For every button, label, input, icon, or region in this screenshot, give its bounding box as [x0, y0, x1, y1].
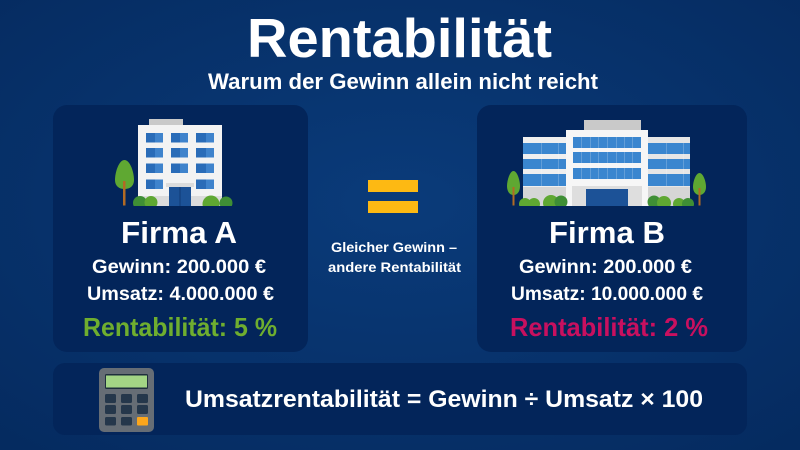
title: Rentabilität — [247, 7, 552, 69]
text: Umsatz A: Umsatz: 4.000.000 € — [87, 283, 274, 305]
panel: Firma A — [53, 105, 308, 352]
text: same profit note: Gleicher Gewinn – — [331, 239, 457, 255]
text: Rentabilität B: Rentabilität: 2 % — [510, 312, 708, 342]
icon: equals sign — [368, 180, 418, 213]
icon: office building A — [115, 119, 232, 212]
panel: Firma B — [477, 105, 747, 352]
text: Gewinn B: Gewinn: 200.000 € — [519, 256, 692, 278]
text: Rentabilität A: Rentabilität: 5 % — [83, 312, 277, 342]
heading: Firma A: Firma A — [121, 215, 237, 250]
text: Umsatz B: Umsatz: 10.000.000 € — [511, 283, 703, 305]
text: same profit note — [328, 239, 461, 275]
subtitle: Warum der Gewinn allein nicht reicht — [208, 69, 599, 94]
heading: Firma B: Firma B — [549, 215, 665, 250]
icon: office building B — [507, 120, 706, 211]
text: formula: Umsatzrentabilität = Gewinn ÷ Umsatz × 100 — [185, 386, 703, 413]
panel: formula — [53, 363, 747, 435]
text: Gewinn A: Gewinn: 200.000 € — [92, 256, 266, 278]
text: same profit note: andere Rentabilität — [328, 259, 461, 275]
icon: calculator — [99, 368, 154, 432]
